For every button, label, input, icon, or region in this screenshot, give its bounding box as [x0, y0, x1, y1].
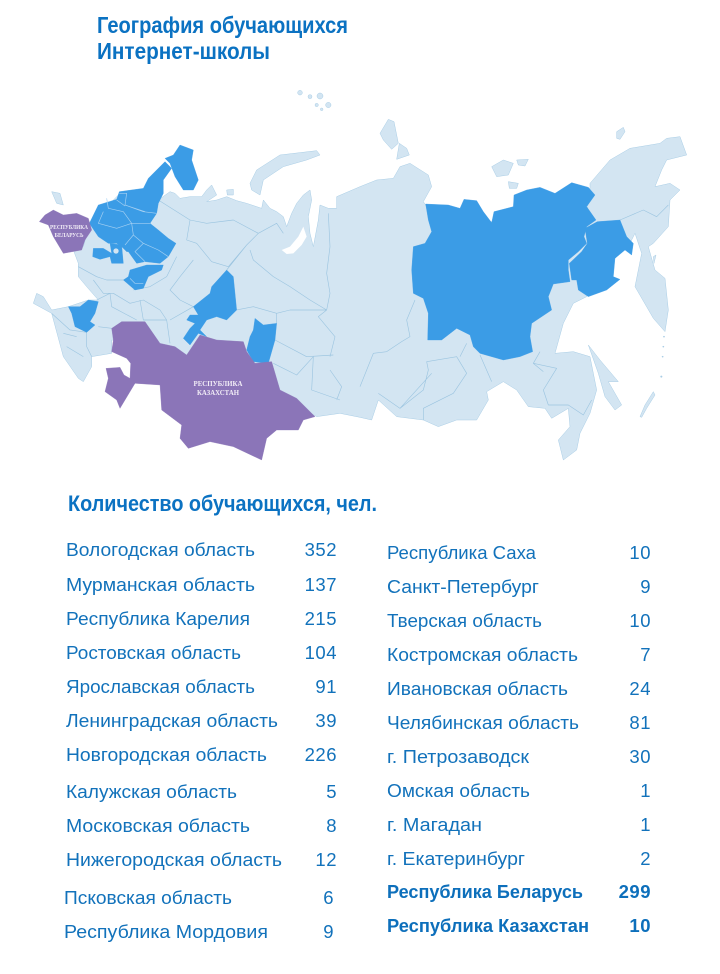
- list: left column: Ростовская область: [66, 642, 241, 663]
- list: left column: 8: [326, 815, 337, 836]
- list: right column: 299: [619, 881, 651, 902]
- title: Интернет-школы: [97, 38, 270, 64]
- region: Republic of Belarus: [39, 210, 92, 253]
- list: left column: Республика Карелия: [66, 608, 250, 629]
- regions: Kaluga and Moscow: [93, 243, 123, 263]
- region: Republic of Sakha: [412, 183, 596, 360]
- list: right column: 2: [640, 848, 651, 869]
- list: left column: 215: [305, 608, 337, 629]
- region: Rostov: [68, 300, 98, 332]
- list: left column: 104: [305, 642, 337, 663]
- label: Kazakhstan: [194, 379, 243, 397]
- list: right column: Костромская область: [387, 644, 578, 665]
- map: eastern islands and region lines: [360, 119, 668, 420]
- list: left column: Республика Мордовия: [64, 921, 268, 942]
- label: Belarus: РЕСПУБЛИКА: [50, 224, 88, 231]
- list: left column: Калужская область: [66, 781, 237, 802]
- list: right column: 10: [629, 542, 651, 563]
- list: right column: г. Екатеринбург: [387, 848, 525, 869]
- list: right column: Омская область: [387, 780, 530, 801]
- list: left column: 137: [305, 574, 337, 595]
- list: left column: 91: [315, 676, 337, 697]
- list: right column: 81: [629, 712, 651, 733]
- list: right column: 7: [640, 644, 651, 665]
- list: right column: Республика Казахстан: [387, 915, 589, 936]
- heading: number of students: Количество обучающихся, чел.: [68, 491, 377, 516]
- list: left column: 9: [323, 921, 334, 942]
- label: Belarus: БЕЛАРУСЬ: [54, 232, 84, 239]
- list: right column: [387, 542, 651, 936]
- list: left column: 352: [305, 539, 337, 560]
- regions: Nizhny Novgorod and Mordovia: [123, 265, 163, 290]
- list: left column: Нижегородская область: [66, 849, 282, 870]
- list: left column: 39: [315, 710, 337, 731]
- list: right column: Республика Саха: [387, 542, 537, 563]
- list: right column: 9: [640, 576, 651, 597]
- region: Republic of Kazakhstan: [105, 322, 315, 460]
- list: right column: 24: [629, 678, 651, 699]
- list: left column: [64, 539, 337, 942]
- list: right column: Ивановская область: [387, 678, 568, 699]
- list: right column: Санкт-Петербург: [387, 576, 539, 597]
- list: right column: Челябинская область: [387, 712, 579, 733]
- list: left column: Ярославская область: [66, 676, 255, 697]
- map: Russia base: [33, 90, 687, 460]
- list: right column: 1: [640, 814, 651, 835]
- title: География обучающихся: [97, 12, 348, 38]
- list: left column: 5: [326, 781, 337, 802]
- title: [97, 12, 348, 64]
- list: left column: Псковская область: [64, 887, 232, 908]
- list: right column: Тверская область: [387, 610, 542, 631]
- list: left column: Новгородская область: [66, 744, 267, 765]
- list: right column: 30: [629, 746, 651, 767]
- region: Magadan: [569, 220, 633, 297]
- list: left column: Вологодская область: [66, 539, 255, 560]
- regions: Sverdlovsk and Chelyabinsk: [183, 270, 237, 345]
- region: Omsk: [247, 318, 277, 363]
- list: right column: 10: [629, 610, 651, 631]
- label: Kazakhstan: КАЗАХСТАН: [197, 388, 239, 397]
- list: left column: Ленинградская область: [66, 710, 278, 731]
- list: left column: 6: [323, 887, 334, 908]
- list: right column: 10: [629, 915, 651, 936]
- list: left column: Мурманская область: [66, 574, 255, 595]
- list: left column: Московская область: [66, 815, 250, 836]
- list: right column: г. Петрозаводск: [387, 746, 530, 767]
- label: Kazakhstan: РЕСПУБЛИКА: [194, 379, 243, 388]
- map of Russia with neighbouring republics: [33, 90, 687, 460]
- list: left column: 12: [315, 849, 337, 870]
- list: right column: 1: [640, 780, 651, 801]
- list: right column: Республика Беларусь: [387, 881, 583, 902]
- label: Belarus: [50, 224, 88, 239]
- list: left column: 226: [305, 744, 337, 765]
- list: right column: г. Магадан: [387, 814, 482, 835]
- regions: north-west Russia: [89, 145, 198, 263]
